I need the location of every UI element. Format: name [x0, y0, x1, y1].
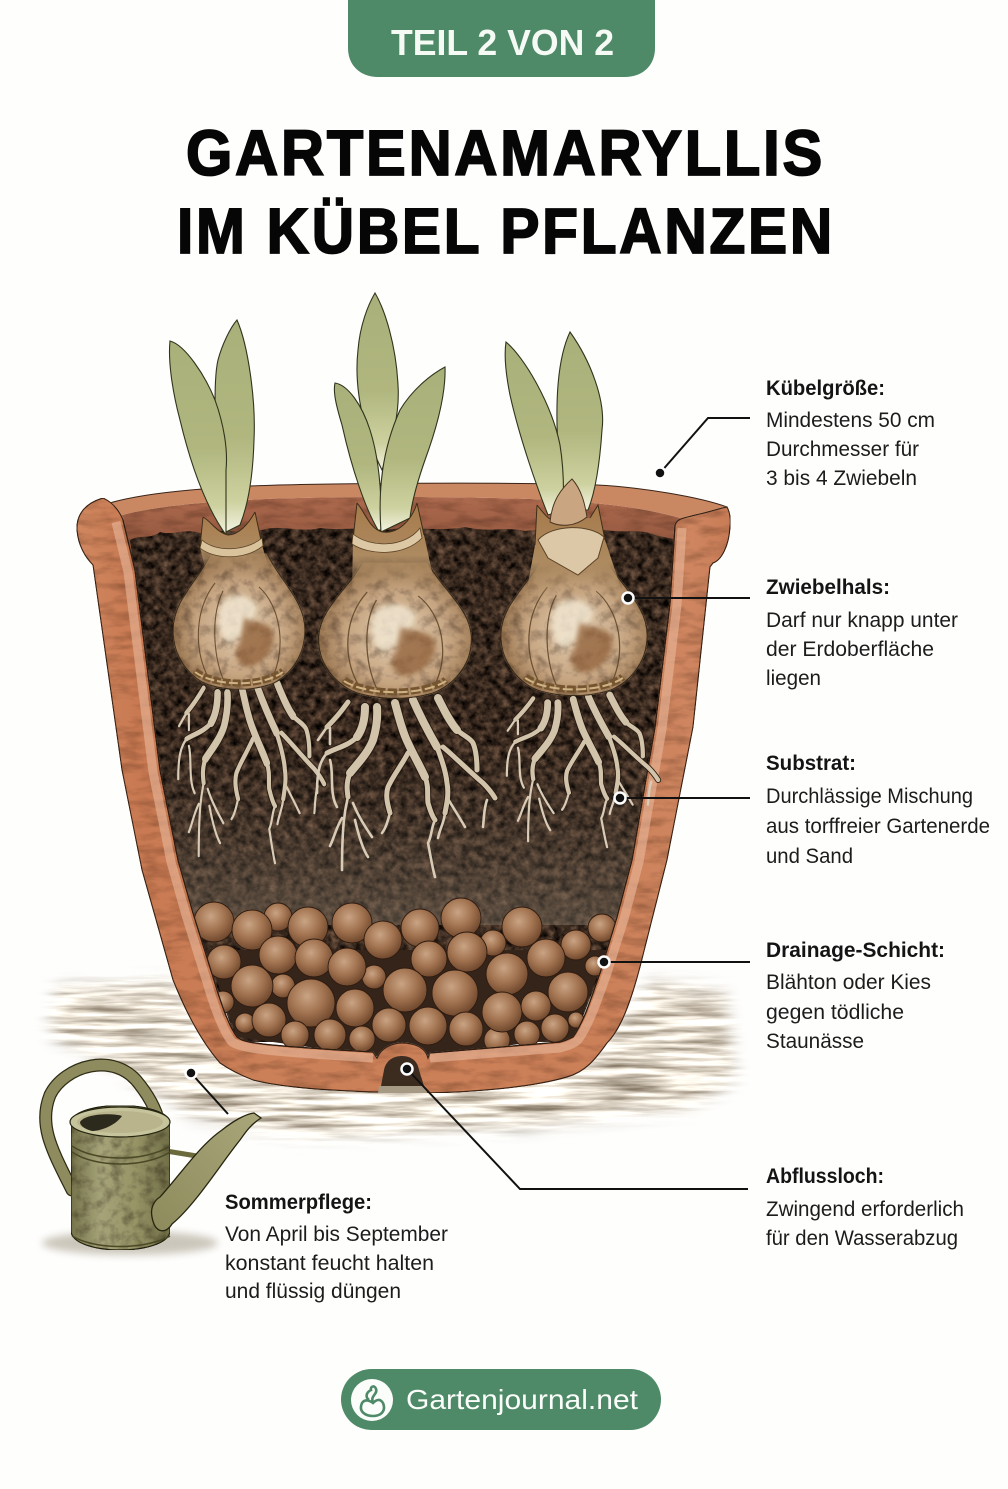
plant 1 — [169, 320, 324, 863]
leader dots — [186, 468, 666, 1078]
drain hole — [381, 1056, 424, 1086]
leader lines — [191, 418, 750, 1189]
callout: Sommerpflege — [225, 1191, 448, 1303]
callout: Sommerpflege: und flüssig düngen — [225, 1279, 401, 1303]
roots — [507, 695, 658, 847]
plant 2 — [317, 293, 495, 877]
callout: Drainage-Schicht: Blähton oder Kies — [766, 970, 931, 994]
soil — [130, 527, 678, 1042]
bulb — [173, 512, 305, 690]
callout: Substrat: und Sand — [766, 844, 853, 868]
banner: part label: TEIL 2 VON 2 — [391, 22, 614, 63]
banner: part label — [348, 0, 655, 77]
pot inner edge highlight — [116, 522, 682, 1058]
can body — [71, 1106, 170, 1250]
title — [177, 117, 835, 267]
callout: Abflussloch: Zwingend erforderlich — [766, 1197, 964, 1221]
callout: Kübelgröße — [766, 377, 935, 490]
can top — [70, 1107, 170, 1137]
leaves — [169, 320, 254, 535]
pot inner back wall — [110, 497, 680, 565]
watering can — [42, 1065, 261, 1255]
plant 3 — [501, 332, 658, 847]
callout: Zwiebelhals — [766, 576, 958, 690]
can brace — [160, 1150, 203, 1157]
can handle — [46, 1065, 160, 1190]
callout: Abflussloch — [766, 1165, 964, 1250]
callout leaders — [186, 418, 750, 1189]
bulb — [501, 479, 647, 696]
can bands — [72, 1146, 170, 1246]
callout: Drainage-Schicht: Drainage-Schicht: — [766, 939, 945, 962]
roots — [317, 698, 495, 877]
footer brand pill — [341, 1369, 661, 1430]
callout: Zwiebelhals: Darf nur knapp unter — [766, 608, 958, 632]
callout: Kübelgröße: Durchmesser für — [766, 437, 919, 461]
clay drainage balls — [194, 898, 616, 1056]
callout: Substrat: aus torffreier Gartenerde — [766, 814, 990, 838]
pot rim back — [80, 483, 727, 530]
terracotta pot — [77, 483, 730, 1093]
title: GARTENAMARYLLIS — [186, 117, 825, 189]
pot cut section wall — [77, 498, 730, 1093]
callout: Abflussloch: für den Wasserabzug — [766, 1226, 958, 1250]
ground wash — [40, 972, 745, 1143]
callout: Abflussloch: Abflussloch: — [766, 1165, 884, 1188]
callout: Kübelgröße: Kübelgröße: — [766, 377, 885, 400]
callout: Sommerpflege: konstant feucht halten — [225, 1251, 434, 1275]
callout: Substrat: Durchlässige Mischung — [766, 784, 973, 808]
can shadow — [42, 1231, 218, 1255]
callout: Sommerpflege: Von April bis September — [225, 1222, 448, 1246]
drain hole ground gap — [378, 1086, 427, 1093]
callout: Sommerpflege: Sommerpflege: — [225, 1191, 372, 1214]
bulb — [318, 503, 472, 698]
callout: Substrat: Substrat: — [766, 752, 856, 775]
callout: Drainage-Schicht: gegen tödliche — [766, 1000, 904, 1024]
leaves — [334, 293, 445, 532]
can spout — [152, 1113, 261, 1231]
callout: Kübelgröße: 3 bis 4 Zwiebeln — [766, 466, 917, 490]
title: IM KÜBEL PFLANZEN — [177, 195, 835, 267]
callout: Substrat — [766, 752, 990, 868]
footer brand pill: Gartenjournal.net — [406, 1384, 638, 1415]
callout: Zwiebelhals: der Erdoberfläche — [766, 637, 934, 661]
roots — [178, 684, 324, 863]
callout: Zwiebelhals: liegen — [766, 666, 821, 690]
leaves — [505, 332, 603, 515]
callout: Zwiebelhals: Zwiebelhals: — [766, 576, 890, 599]
pot inner edge line — [123, 520, 675, 1053]
callout: Kübelgröße: Mindestens 50 cm — [766, 408, 935, 432]
callout: Drainage-Schicht: Staunässe — [766, 1029, 864, 1053]
logo icon — [351, 1379, 393, 1421]
soil lower fade — [158, 740, 658, 925]
callout: Drainage-Schicht — [766, 939, 945, 1053]
